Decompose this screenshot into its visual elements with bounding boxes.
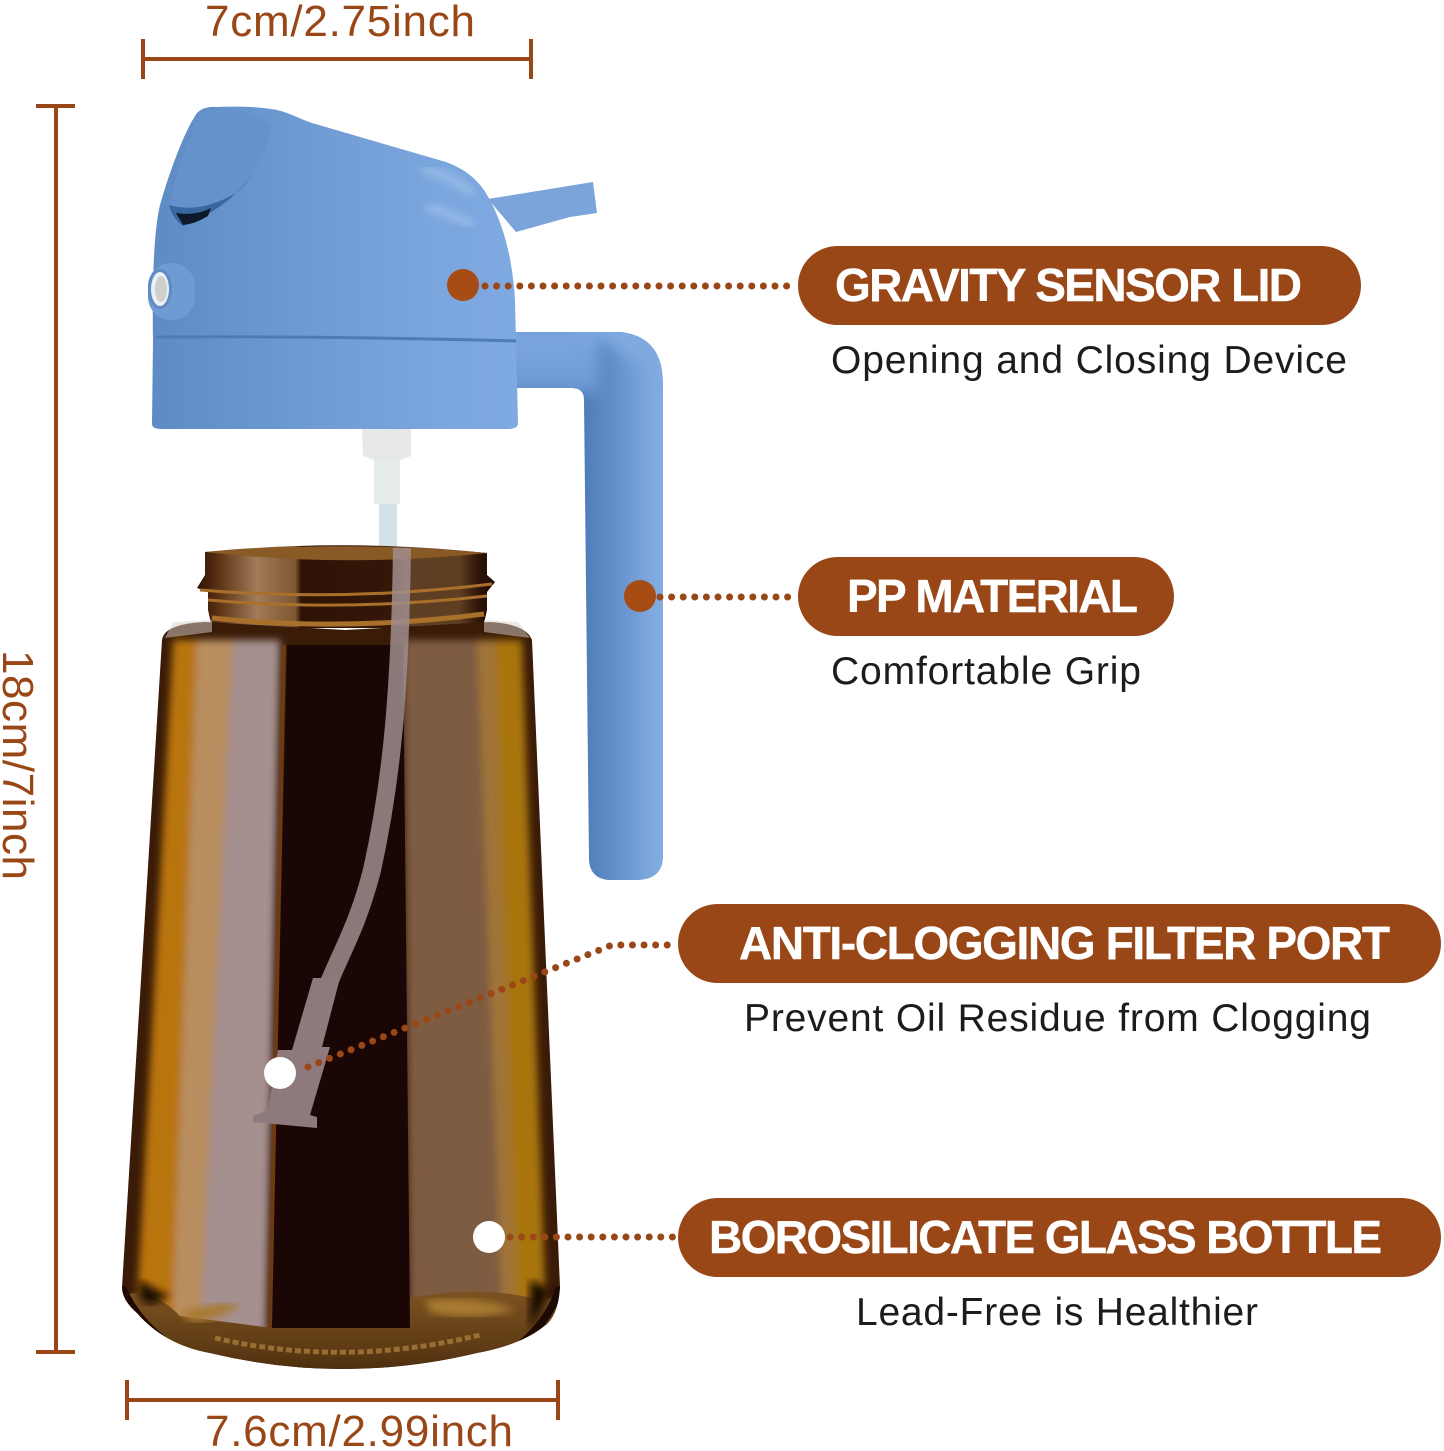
callout: pp material: [624, 557, 1174, 693]
tan band: [172, 640, 233, 1340]
bottle base: [124, 1292, 559, 1369]
black core: [271, 645, 410, 1328]
callout: borosilicate glass bottle: [473, 1198, 1441, 1334]
lid button: [148, 263, 195, 320]
callout: gravity sensor lid: Opening and Closing Device: [831, 339, 1347, 382]
bottle neck: [197, 545, 495, 628]
callout: gravity sensor lid: GRAVITY SENSOR LID: [835, 259, 1302, 311]
lid: [152, 107, 518, 429]
callout: anti-clogging filter port: ANTI-CLOGGING FILTER PORT: [739, 917, 1390, 969]
lid groove: [156, 337, 516, 341]
callout: anti-clogging filter port: Prevent Oil Residue from Clogging: [744, 997, 1371, 1040]
amber left band: [135, 640, 197, 1340]
callout: gravity sensor lid: [447, 246, 1361, 382]
mauve band: [200, 640, 280, 1340]
icon: bottle illustration: [110, 107, 680, 1390]
tan right band: [477, 640, 518, 1340]
gold band: [495, 640, 547, 1340]
handle: [516, 332, 663, 880]
dimension: base width: [127, 1380, 558, 1451]
filter port: [253, 978, 340, 1128]
callout: pp material: PP MATERIAL: [847, 570, 1138, 622]
dimension: height: [0, 106, 75, 1352]
lid tab: [488, 182, 597, 232]
dimension: lid width: [143, 0, 531, 79]
dip tube: [328, 548, 402, 985]
lid trigger: [170, 111, 270, 209]
nozzle: [362, 428, 411, 548]
callout: borosilicate glass bottle: Lead-Free is Healthier: [856, 1291, 1258, 1334]
trigger slot: [169, 175, 253, 226]
lid highlight: [425, 170, 470, 224]
taupe band: [403, 640, 503, 1340]
bottle body: [110, 610, 570, 1390]
callout: pp material: Comfortable Grip: [831, 650, 1141, 693]
callout: anti-clogging filter port: [264, 904, 1441, 1089]
body shoulder: [165, 620, 530, 638]
callout: borosilicate glass bottle: BOROSILICATE GLASS BOTTLE: [709, 1211, 1382, 1263]
